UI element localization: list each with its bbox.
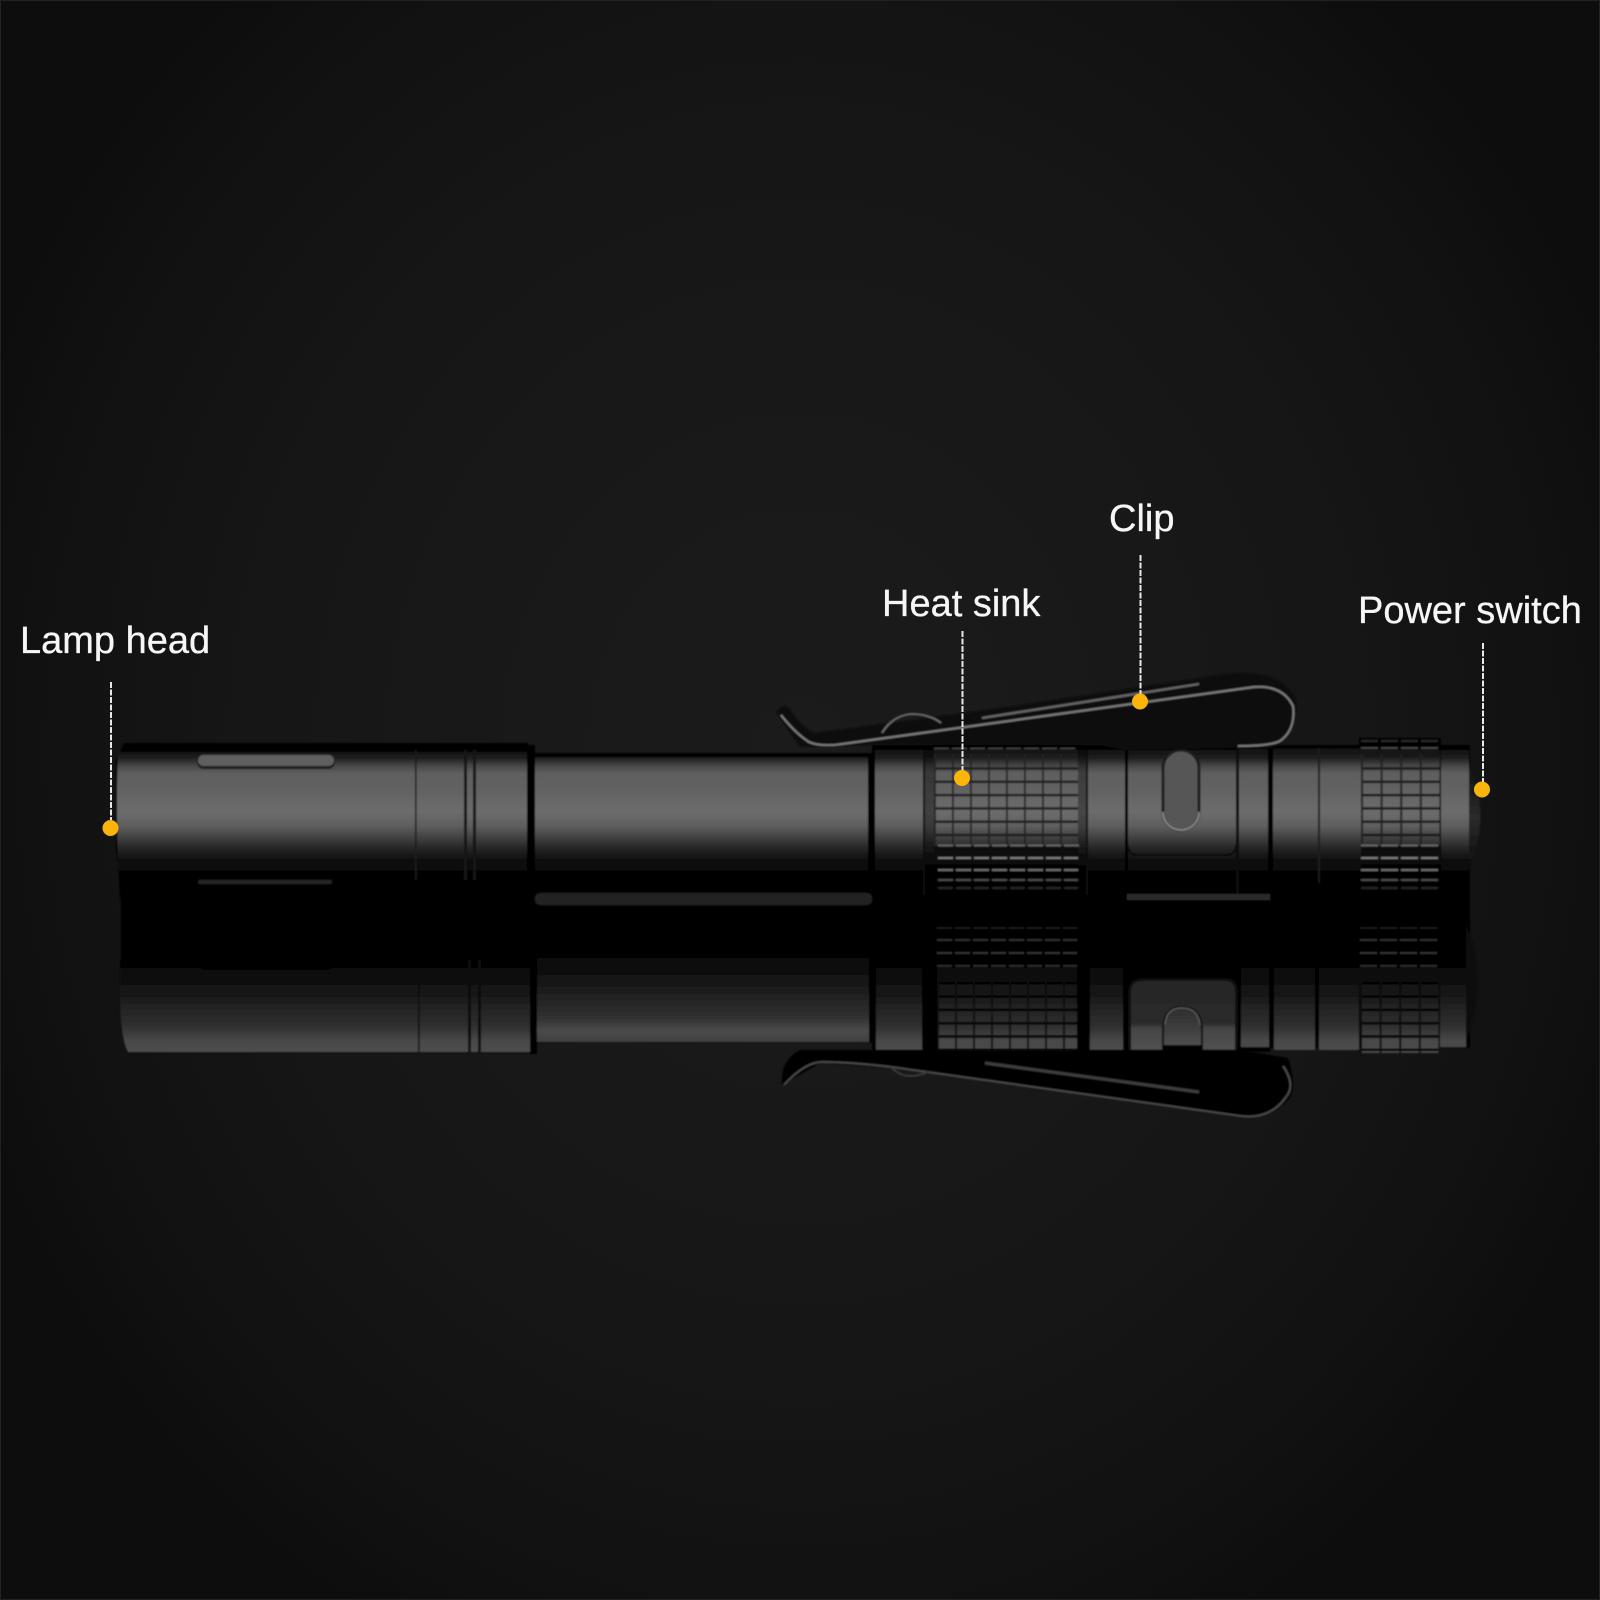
marker dot: clip bbox=[1132, 694, 1148, 710]
section before clip bbox=[1088, 750, 1125, 900]
leader line: heat sink bbox=[962, 631, 964, 771]
reflected clip arm bbox=[784, 1062, 1290, 1117]
flashlight: main body bbox=[116, 738, 1480, 1062]
reflection: clip plate bbox=[1128, 978, 1238, 1062]
label: power switch: Power switch bbox=[1358, 590, 1582, 632]
tail knurled grip bbox=[1361, 741, 1440, 900]
reflected clip bar bbox=[985, 1063, 1199, 1092]
clip arm bbox=[781, 687, 1293, 746]
label: clip: Clip bbox=[1109, 498, 1174, 540]
callout: power switch bbox=[1358, 590, 1582, 798]
callout: clip bbox=[1109, 498, 1174, 710]
leader line: power switch bbox=[1482, 643, 1484, 782]
reflection: tail grip bbox=[1360, 928, 1439, 1053]
leader line: clip bbox=[1140, 555, 1142, 695]
clip plate slot bbox=[1163, 750, 1199, 830]
reflected clip bbox=[782, 1050, 1293, 1117]
pocket clip bbox=[776, 673, 1296, 750]
callout: heat sink bbox=[882, 583, 1041, 786]
tail section bbox=[1273, 748, 1361, 900]
clip plate bbox=[1125, 740, 1273, 900]
reflection: section before clip bbox=[1090, 960, 1123, 1053]
body silhouette and shadow bbox=[116, 738, 1470, 1054]
label: heat sink: Heat sink bbox=[882, 583, 1041, 625]
heat sink collar bbox=[875, 750, 923, 900]
lamp head segment bbox=[117, 745, 535, 900]
marker dot: lamp head bbox=[102, 820, 118, 836]
marker dot: heat sink bbox=[954, 770, 970, 786]
lamp head upper slot bbox=[197, 754, 335, 769]
reflected clip arch bbox=[891, 1067, 928, 1076]
clip shadow bbox=[776, 673, 1296, 750]
reflection: heat sink grip bbox=[937, 928, 1077, 1053]
leader line: lamp head bbox=[110, 682, 112, 820]
power switch cap bbox=[1469, 767, 1480, 868]
reflection: collar bbox=[876, 960, 922, 1053]
reflection: tail section bbox=[1274, 960, 1359, 1050]
heat sink knurled grip bbox=[923, 748, 1088, 900]
reflection: middle tube bbox=[537, 950, 869, 1042]
callout: lamp head bbox=[20, 620, 210, 836]
clip upper bar bbox=[982, 684, 1199, 718]
clip small arch bbox=[882, 714, 941, 733]
reflection: tail end bbox=[1440, 925, 1478, 1047]
reflection: band bbox=[1241, 960, 1269, 1047]
lamp head lower slot bbox=[198, 880, 332, 884]
marker dot: power switch bbox=[1474, 782, 1490, 798]
middle tube bbox=[535, 757, 872, 905]
tail end bbox=[1441, 750, 1469, 900]
label: lamp head: Lamp head bbox=[20, 620, 210, 662]
reflection: lamp head bbox=[120, 950, 537, 1054]
reflected clip shadow bbox=[782, 1050, 1293, 1117]
